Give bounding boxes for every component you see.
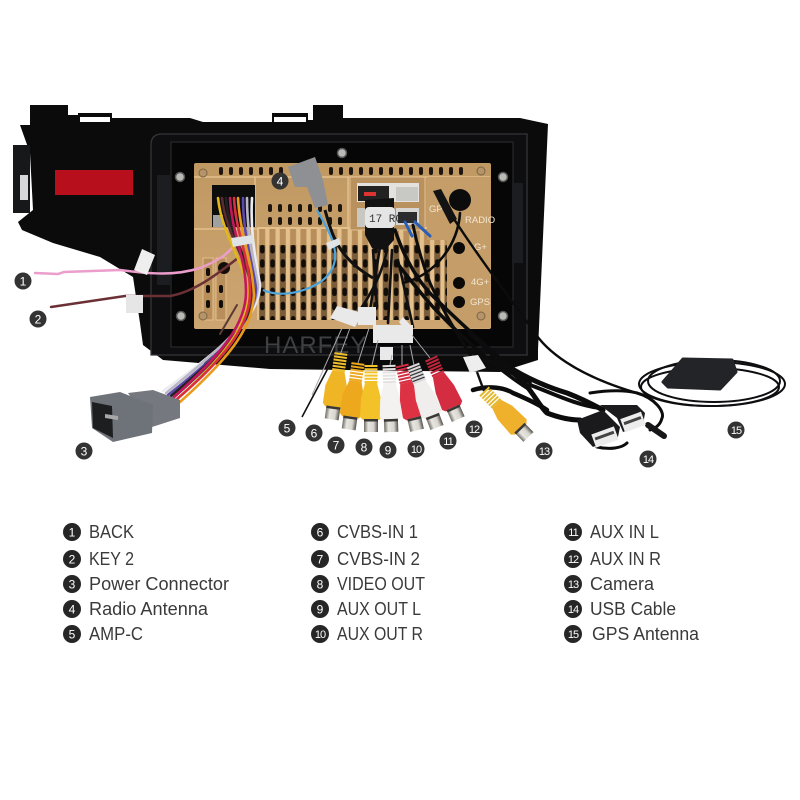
item 8: 8 [317,578,324,592]
USB port rear [620,412,646,432]
connector block [90,392,153,442]
mounting screw right [477,312,485,320]
white tag [134,249,155,275]
callout 7: 7 [333,438,340,452]
callout 9: 9 [385,444,392,458]
item 11 [564,522,659,542]
item 12: 12 [568,554,579,566]
callout 12: 12 [469,424,480,436]
bracket opening left [80,117,110,122]
RCA white 6 [403,361,447,431]
callout 8: 8 [361,440,368,454]
USB port front [591,426,619,448]
item 4: 4 [69,602,76,616]
raised plate outlines [194,177,490,229]
coil [639,360,785,406]
blue tips [405,222,430,236]
item 5: 5 [69,628,76,642]
RCA yellow 2 [338,361,369,431]
item 10: AUX OUT R [337,624,423,644]
item 13: 13 [568,579,579,591]
RCA connectors [321,351,468,433]
legend column 1 [63,522,229,644]
callout 4 [272,172,288,190]
callout 3 [76,442,92,460]
item 11: AUX IN L [590,522,659,542]
vent dark strips [257,245,447,320]
connector socket [92,402,113,438]
radio antenna cable [403,213,460,283]
item 7: 7 [317,552,324,566]
RCA yellow 3 [360,365,382,432]
middle cable [530,385,600,408]
item 6: 6 [317,526,324,540]
item 3: 3 [69,578,76,592]
socket base [213,215,223,227]
USB loop [590,391,663,430]
under loop [597,443,627,448]
callout 15: 15 [731,425,742,437]
RCA camera yellow [476,383,536,445]
camera lead [477,372,484,391]
thin black leads [360,247,413,327]
connector tail [128,390,180,427]
collar text: 17 RC [369,214,402,226]
callout 4: 4 [277,174,284,188]
item 9 [311,599,421,619]
blue wire [263,210,335,294]
brown wire [51,258,238,307]
item 13: Camera [590,574,655,594]
item 5: AMP-C [89,624,143,644]
callout 15 [728,422,744,438]
callout 3: 3 [81,444,88,458]
callout 7 [328,436,344,454]
callout 9 [380,442,396,458]
head unit back panel [13,105,548,372]
power connector [90,390,180,442]
item 12 [564,549,661,569]
legend column 2 [311,522,425,644]
inner frame edge [171,142,513,347]
bundle outer [470,333,603,410]
callout 11 [440,432,456,450]
port labels: 4G+ [471,277,490,288]
camera tag [463,355,486,373]
cable bundle on plate [395,205,637,393]
red reflector [55,170,133,195]
bracket opening right [274,117,306,122]
inner frame [151,134,527,355]
callout 12 [466,420,482,438]
metal screws [176,148,508,320]
callout 14 [640,450,656,468]
black bezel [18,105,548,372]
white connector left lower [357,208,367,227]
connector head [288,157,328,208]
callout 6 [306,424,322,442]
USB plug front [577,410,620,447]
port block [350,177,425,230]
connector socket right [396,187,418,201]
harness clip [231,235,254,247]
RCA red 5 [391,363,428,433]
white tag [126,295,143,313]
radio antenna connector and wires [263,157,373,294]
lower left vent [203,258,230,320]
callout 8 [356,438,372,456]
connector socket left [358,186,389,201]
callout 1 [14,272,32,290]
item 14: USB Cable [590,599,676,619]
GPS antenna [639,359,785,406]
cable end [648,425,664,436]
item 15: 15 [568,629,579,641]
item 7: CVBS-IN 2 [337,549,420,569]
item 3: Power Connector [89,574,229,594]
item 11: 11 [568,527,579,539]
RCA white 4 [378,365,402,432]
camera coil [473,387,547,410]
GP plug [433,189,457,224]
item 8: VIDEO OUT [337,574,425,594]
right antenna plate [427,177,490,328]
item 6: CVBS-IN 1 [337,522,418,542]
white collar [365,207,395,228]
port labels: GPS [470,297,490,308]
callout 14: 14 [643,454,654,466]
item 5 [63,624,143,644]
callout 2 [30,310,46,328]
GP antenna cable [445,205,637,393]
callout 13 [536,442,552,460]
number callouts [14,172,744,468]
callout 10: 10 [411,444,422,456]
item 2 [63,549,134,569]
port labels: RADIO [465,215,495,226]
callout 11: 11 [443,436,454,448]
side clip [13,145,30,213]
vent columns [257,227,447,320]
lower socket [398,212,417,223]
callout 13: 13 [539,446,550,458]
item 4: Radio Antenna [89,599,209,619]
lower connector [396,208,419,225]
callout 10 [408,440,424,458]
loom collar [365,198,394,250]
thin RCA leads [312,325,430,395]
item 1 [63,522,134,542]
port labels [429,204,495,308]
RCA yellow 1 [321,351,352,421]
callout 1: 1 [20,274,27,288]
item 10 [311,624,423,644]
item 2: 2 [69,552,76,566]
black AMP-C lead [302,355,335,417]
radio antenna plug [449,189,471,211]
USB plugs [577,405,646,448]
mounting screw top [477,167,485,175]
item 9: 9 [317,602,324,616]
gold rear plate [194,163,495,329]
white tags on RCA leads [330,306,413,360]
white connector upper [357,183,419,202]
item 12: AUX IN R [590,549,661,569]
USB plug rear [600,405,645,432]
watermark: HARFEY [264,332,367,359]
mounting screw [199,169,207,177]
KEY and BACK wires [35,244,238,313]
pink wire [35,244,235,274]
power wire harness [163,198,260,402]
mid holes [268,204,342,225]
wire clip [326,238,341,250]
connector pins [105,414,118,420]
item 1: 1 [69,526,76,540]
vent holes [257,245,447,320]
item 14: 14 [568,604,579,616]
item 10: 10 [315,629,326,641]
RCA red 7 [421,354,468,424]
mounting screw [199,312,207,320]
side ribs [157,175,523,285]
main cable loom [360,189,637,393]
callout 6: 6 [311,426,318,440]
socket red wires [364,192,376,196]
item 1: BACK [89,522,134,542]
power socket [212,185,255,227]
port labels: GP [429,204,443,215]
item 9: AUX OUT L [337,599,421,619]
USB and camera cable bundle [470,333,664,448]
antenna puck [663,359,736,389]
black wire [325,210,373,278]
item 2: KEY 2 [89,549,134,569]
antenna holes [453,242,465,308]
legend column 3 [564,522,700,644]
vent slots top row [219,167,463,175]
port labels: G+ [474,242,487,253]
callout 5 [278,420,296,436]
callout 2: 2 [35,312,42,326]
callout 5: 5 [284,422,291,436]
side clip label [20,175,28,200]
item 15: GPS Antenna [592,624,700,644]
bundle lower [470,350,580,420]
